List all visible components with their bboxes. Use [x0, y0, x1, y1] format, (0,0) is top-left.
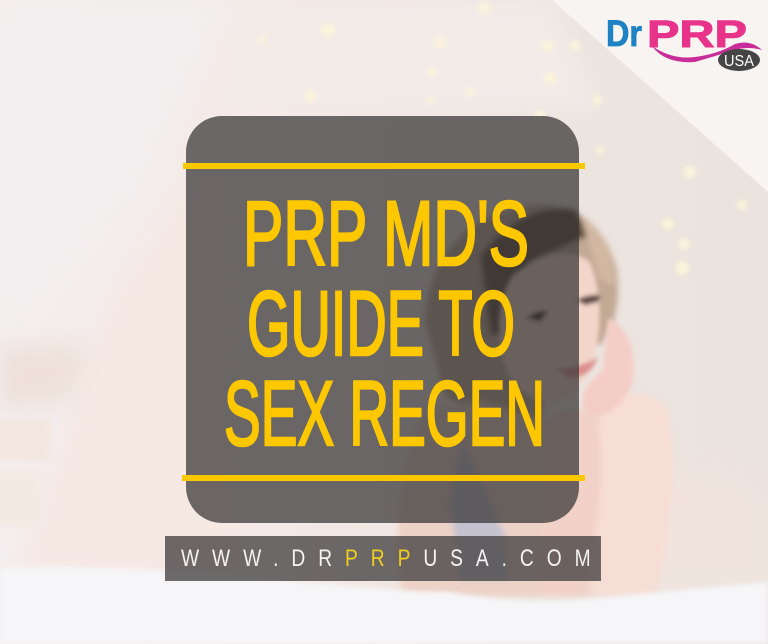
title: SEX REGEN	[224, 363, 545, 465]
logo word PRP: PRP	[647, 14, 747, 56]
logo word Dr: Dr	[606, 13, 642, 54]
title panel	[182, 116, 585, 523]
logo USA badge	[718, 49, 760, 71]
canopy drapes	[0, 0, 600, 590]
logo corner panel	[552, 0, 768, 192]
woman's face	[499, 254, 634, 415]
woman's body and arm	[398, 393, 673, 596]
right cushion	[640, 464, 768, 590]
bottom yellow rule	[182, 475, 585, 481]
logo USA badge: USA	[724, 53, 754, 70]
logo swoosh	[652, 42, 762, 62]
woman's hair	[425, 205, 618, 420]
title: GUIDE TO	[247, 273, 515, 375]
white bed sheet	[0, 567, 768, 644]
logo: Dr PRP USA	[606, 13, 762, 71]
top yellow rule	[183, 163, 585, 169]
website bar	[165, 536, 601, 581]
title: PRP MD'S	[243, 183, 529, 285]
website address: WWW.DR PRP USA.COM	[181, 544, 591, 572]
bokeh lights	[258, 2, 750, 275]
title	[224, 183, 545, 465]
bed headboard panels	[0, 420, 50, 526]
